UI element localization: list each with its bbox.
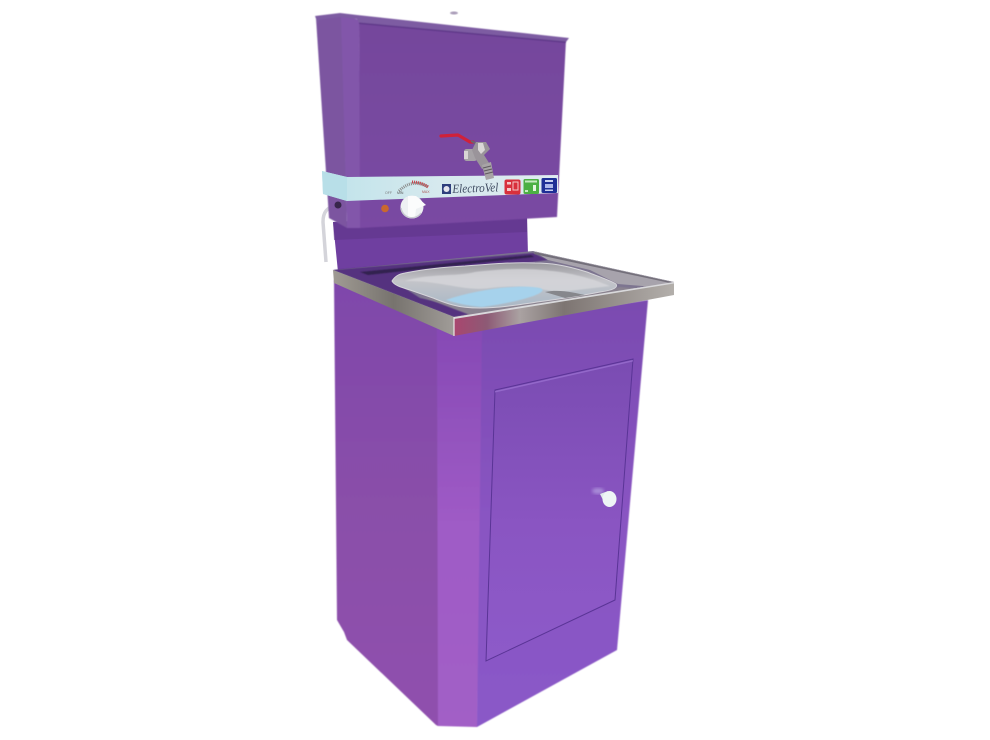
thermostat knob xyxy=(400,196,426,218)
blue badge xyxy=(542,178,557,193)
stainless basin xyxy=(392,263,617,308)
red badge xyxy=(504,180,520,194)
worktop front edge xyxy=(454,282,674,336)
cabinet door xyxy=(486,359,633,661)
cabinet corner strip xyxy=(437,320,482,727)
water tap xyxy=(441,135,494,180)
tank lid xyxy=(315,13,569,42)
brand logo xyxy=(442,184,451,194)
cabinet left face xyxy=(334,280,440,726)
red lever xyxy=(441,135,473,142)
steel rim back right xyxy=(533,251,674,287)
purple reflection on worktop xyxy=(333,253,548,317)
temperature dial scale: MAX xyxy=(422,190,430,194)
tank corner strip xyxy=(341,14,361,228)
base cabinet xyxy=(334,280,648,727)
temperature dial scale: MIN xyxy=(397,191,404,195)
green badge xyxy=(524,179,539,194)
tank side face xyxy=(316,14,347,228)
water heater tank xyxy=(315,13,569,228)
power cable xyxy=(323,206,336,262)
temperature dial scale xyxy=(385,182,430,195)
tank front face xyxy=(359,21,566,228)
power socket xyxy=(334,202,342,208)
worktop left edge xyxy=(333,270,454,336)
worktop surface xyxy=(333,251,674,317)
back panel xyxy=(333,214,528,272)
hose spout xyxy=(482,162,494,180)
label band xyxy=(322,171,558,201)
sink top xyxy=(333,251,674,336)
brand name: ElectroVel xyxy=(451,180,499,196)
cabinet right face xyxy=(477,300,648,727)
indicator lamp xyxy=(381,205,389,212)
tap body xyxy=(464,149,477,161)
speck above tank xyxy=(450,12,458,14)
door knob xyxy=(592,488,616,507)
temperature dial scale: OFF xyxy=(385,191,392,195)
